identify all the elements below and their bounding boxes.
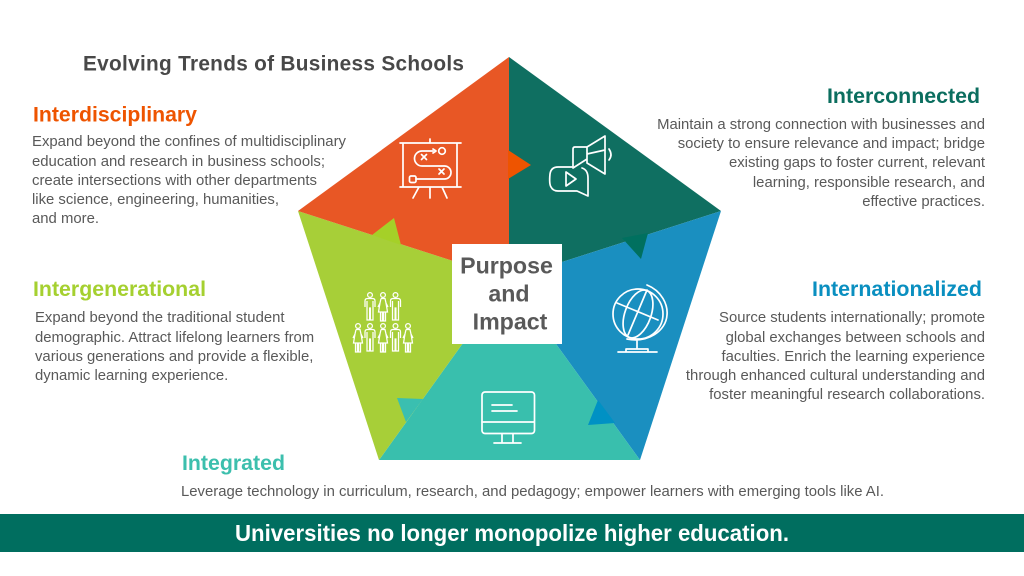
text block: intergenerational: Expand beyond the traditional student bbox=[35, 310, 285, 326]
text block: interconnected: effective practices. bbox=[862, 194, 985, 210]
text block: internationalized: through enhanced cultural understanding and bbox=[686, 368, 985, 384]
text block: interconnected: existing gaps to foster current, relevant bbox=[729, 155, 986, 171]
icon: strategy board bbox=[400, 139, 461, 198]
text block: intergenerational: Intergenerational bbox=[33, 277, 206, 301]
text block: intergenerational bbox=[33, 277, 314, 384]
arrow: blue notch bbox=[588, 400, 615, 425]
text block: interdisciplinary: and more. bbox=[32, 211, 99, 227]
segment: intergenerational bbox=[298, 211, 509, 460]
banner bbox=[0, 514, 1024, 552]
center box: purpose and impact bbox=[452, 244, 562, 344]
pentagon diagram bbox=[298, 57, 721, 460]
text block: interconnected: Interconnected bbox=[827, 84, 980, 108]
icon: globe bbox=[613, 285, 667, 352]
segment: integrated bbox=[379, 279, 640, 460]
segment: interdisciplinary bbox=[298, 57, 509, 279]
arrow: turquoise notch bbox=[397, 398, 423, 422]
center box: purpose and impact: and bbox=[488, 280, 530, 306]
text block: interdisciplinary: create intersections with other departments bbox=[32, 173, 317, 189]
text block: internationalized: Source students internationally; promote bbox=[719, 310, 985, 326]
icon: megaphone and video bbox=[550, 136, 611, 196]
banner: Universities no longer monopolize higher education. bbox=[235, 520, 789, 546]
arrow: green notch bbox=[372, 218, 401, 245]
text block: internationalized: global exchanges between schools and bbox=[726, 330, 985, 346]
text block: intergenerational: dynamic learning experience. bbox=[35, 368, 228, 384]
text block: intergenerational: demographic. Attract lifelong learners from bbox=[35, 330, 314, 346]
text block: interconnected: society to ensure relevance and impact; bridge bbox=[678, 136, 985, 152]
center box: purpose and impact: Impact bbox=[473, 308, 548, 334]
segment: internationalized bbox=[509, 211, 721, 460]
title: Evolving Trends of Business Schools bbox=[83, 52, 464, 76]
center box: purpose and impact: Purpose bbox=[460, 252, 553, 278]
text block: interconnected: learning, responsible research, and bbox=[753, 175, 985, 191]
text block: interdisciplinary bbox=[32, 102, 347, 227]
segment: interconnected bbox=[509, 57, 721, 279]
icon: group of people bbox=[353, 293, 413, 352]
text block: interconnected: Maintain a strong connection with businesses and bbox=[657, 117, 985, 133]
text block: interdisciplinary: education and research in business schools; bbox=[32, 154, 325, 170]
text block: integrated: Integrated bbox=[182, 451, 285, 475]
icon: computer monitor bbox=[482, 392, 534, 443]
arrow: dark teal notch bbox=[622, 233, 648, 259]
text block: interdisciplinary: like science, engineering, humanities, bbox=[32, 192, 279, 208]
text block: internationalized: faculties. Enrich the learning experience bbox=[722, 349, 985, 365]
text block: interdisciplinary: Expand beyond the confines of multidisciplinary bbox=[32, 134, 347, 150]
text block: integrated bbox=[181, 451, 884, 500]
text block: internationalized: foster meaningful research collaborations. bbox=[709, 387, 985, 403]
text block: integrated: Leverage technology in curriculum, research, and pedagogy; empower learners with emerging tools like AI. bbox=[181, 484, 884, 500]
arrow: orange notch bbox=[508, 150, 531, 179]
text block: interdisciplinary: Interdisciplinary bbox=[33, 102, 197, 126]
text block: internationalized: Internationalized bbox=[812, 277, 982, 301]
text block: interconnected bbox=[657, 84, 986, 210]
text block: internationalized bbox=[686, 277, 985, 403]
text block: intergenerational: various generations and provide a flexible, bbox=[35, 349, 313, 365]
